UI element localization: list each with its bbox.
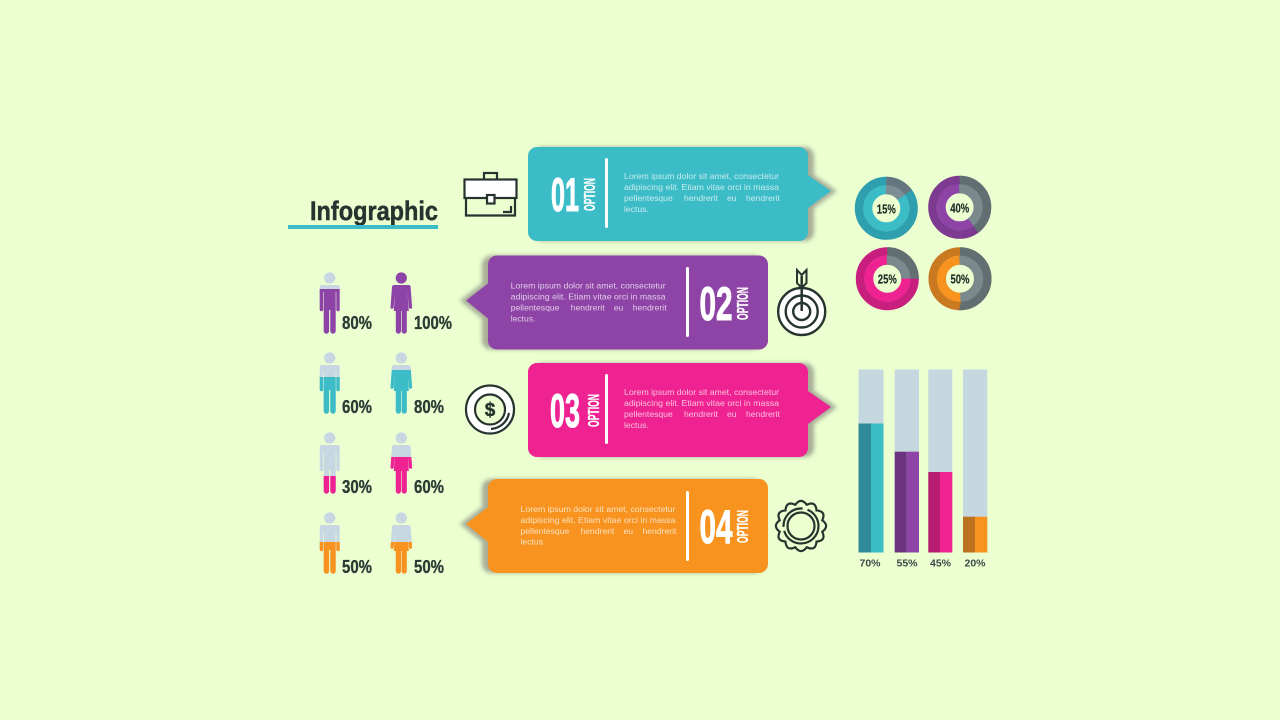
text block 04: adipiscing elit. Etiam vitae orci in massa	[520, 515, 676, 525]
text block 03: hendrerit	[746, 409, 781, 419]
text block 04: eu	[624, 526, 633, 536]
person 50% female	[390, 512, 412, 574]
panel: option 01	[528, 147, 837, 241]
text block 02: pellentesque	[511, 303, 560, 313]
text block 01	[624, 171, 781, 214]
icon: briefcase	[464, 173, 516, 216]
text block 03: lectus.	[624, 420, 649, 430]
bar chart	[858, 370, 987, 570]
label 50%: 50%	[414, 557, 444, 577]
icon: target with arrow	[778, 270, 825, 335]
label: option: OPTION	[735, 287, 752, 320]
bar 55%	[895, 370, 919, 570]
text block 03: hendrerit	[684, 409, 719, 419]
bar 20%: 20%	[964, 558, 986, 570]
text block 03: Lorem ipsum dolor sit amet, consectetur	[624, 387, 779, 397]
panel: option 04	[460, 479, 768, 573]
panel: option 02	[460, 256, 768, 350]
label 100%: 100%	[414, 313, 452, 333]
title	[288, 196, 438, 229]
label: option: OPTION	[586, 394, 603, 427]
icon: dollar coin	[466, 386, 514, 434]
text block 04	[520, 504, 677, 546]
text block 04: Lorem ipsum dolor sit amet, consectetur	[520, 504, 676, 514]
text block 04: hendrerit	[580, 526, 615, 536]
bar 55%: 55%	[896, 558, 918, 570]
person 80%	[320, 272, 340, 334]
text block 01: eu	[727, 193, 737, 203]
text block 02: hendrerit	[571, 303, 605, 313]
number 03: 03	[550, 384, 580, 437]
text block 01: adipiscing elit. Etiam vitae orci in massa	[624, 182, 779, 192]
text block 01: hendrerit	[684, 193, 719, 203]
text block 02: Lorem ipsum dolor sit amet, consectetur	[511, 281, 666, 291]
text block 02: hendrerit	[633, 303, 667, 313]
text block 03	[624, 387, 781, 430]
label 60%: 60%	[342, 397, 372, 417]
text block 02	[511, 281, 667, 324]
donut 15%: 15%	[877, 201, 896, 216]
icon: gear	[776, 501, 826, 551]
person 80% teal	[390, 352, 412, 414]
number 01: 01	[551, 168, 579, 221]
icon: dollar coin: $	[485, 400, 496, 421]
bar 70%	[858, 370, 884, 570]
bar 45%: 45%	[930, 558, 952, 570]
number 02: 02	[700, 277, 732, 330]
label 60%: 60%	[414, 477, 444, 497]
person 30%	[320, 432, 340, 494]
label: option: OPTION	[735, 510, 752, 543]
bar 70%: 70%	[859, 558, 881, 570]
text block 02: eu	[614, 303, 623, 313]
text block 03: eu	[727, 409, 737, 419]
text block 01: lectus.	[624, 204, 649, 214]
text block 04: pellentesque	[520, 526, 569, 536]
donut 25%: 25%	[878, 272, 897, 287]
bar 45%	[928, 370, 952, 570]
panel: option 03	[528, 363, 837, 457]
text block 04: hendrerit	[642, 526, 677, 536]
person 60% pink	[390, 432, 412, 494]
label 30%: 30%	[342, 477, 372, 497]
title: Infographic	[310, 196, 438, 226]
label 50%: 50%	[342, 557, 372, 577]
donut 40%: 40%	[950, 200, 970, 215]
text block 02: lectus.	[511, 314, 536, 324]
text block 01: Lorem ipsum dolor sit amet, consectetur	[624, 171, 779, 181]
person 100%	[390, 272, 412, 334]
person 60% teal	[320, 352, 340, 414]
person 50% male	[320, 512, 340, 574]
people chart	[320, 272, 452, 577]
text block 04: lectus.	[520, 536, 545, 546]
text block 02: adipiscing elit. Etiam vitae orci in massa	[511, 292, 666, 302]
text block 03: pellentesque	[624, 409, 673, 419]
label 80%: 80%	[342, 313, 372, 333]
number 04: 04	[700, 500, 732, 553]
label 80%: 80%	[414, 397, 444, 417]
donut 50%: 50%	[950, 272, 970, 287]
text block 01: pellentesque	[624, 193, 673, 203]
text block 03: adipiscing elit. Etiam vitae orci in massa	[624, 398, 779, 408]
text block 01: hendrerit	[746, 193, 781, 203]
bar 20%	[963, 370, 987, 570]
label: option: OPTION	[582, 178, 599, 211]
donut charts	[859, 180, 987, 306]
